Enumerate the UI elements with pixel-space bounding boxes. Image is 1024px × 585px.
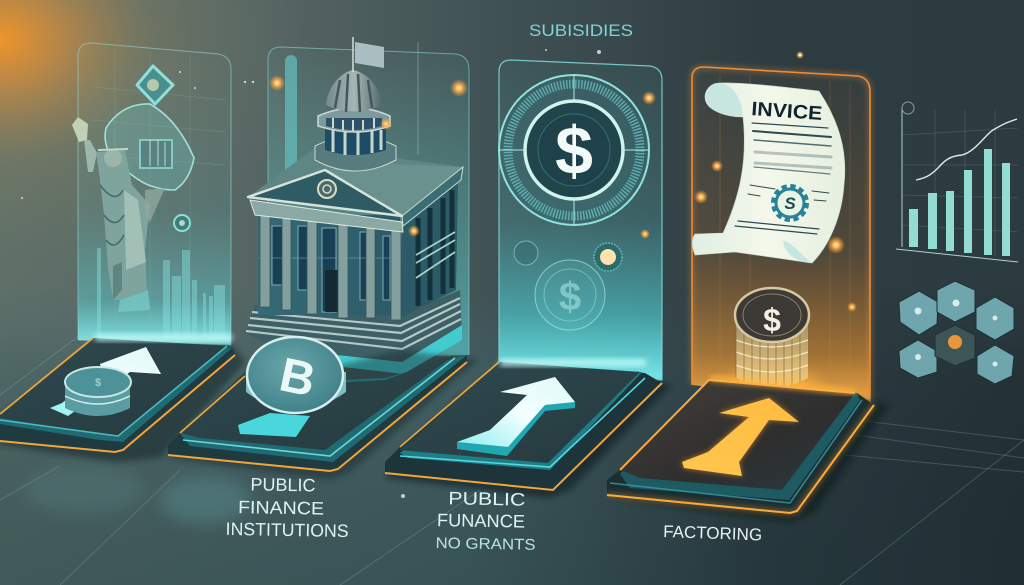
icon: diamond badge [137,66,173,104]
icon: ghost dollar coin: $ [559,275,581,319]
icon: bitcoin coin [246,337,346,413]
icon: arrow [682,398,799,476]
icon: small coins [514,241,622,271]
bars inside panel [97,248,225,340]
icon: ghost dollar coin [535,260,605,330]
label: public funance no grants [435,488,537,554]
icon: gear seal [774,187,806,219]
invoice title: INVICE [751,98,823,125]
label: public funance no grants: FUNANCE [437,510,525,532]
panel 2 frame [268,42,469,360]
drum [315,136,396,171]
chart bars [909,149,1010,256]
icon: arrow [238,413,310,437]
label: public funance no grants: NO GRANTS [435,535,536,554]
mini chart [896,102,1018,262]
dome [326,70,382,112]
label: public finance institutions [225,474,350,541]
trend line [916,119,1017,180]
building: public institution [245,37,463,374]
columns [260,215,401,320]
icon: gear seal: S [784,194,796,213]
pediment [248,170,402,216]
entablature [250,200,403,232]
label: public finance institutions: PUBLIC [250,474,316,495]
panel 1: statue and public support [72,43,231,345]
label: public finance institutions: INSTITUTIONS [225,519,349,541]
side wall [400,180,458,318]
panel 4: factoring [692,51,870,405]
icon: gold coin stack: $ [763,302,781,338]
platform 1 [0,334,245,462]
panel 3: subsidies [499,60,662,380]
icon: arrow [50,347,161,416]
label: public finance institutions: FINANCE [238,497,324,519]
icon: statue of liberty [72,117,165,312]
panel frame [692,67,870,405]
icon: invoice scroll [692,83,845,263]
platform 3 [385,359,672,498]
icon: small ring [174,215,190,231]
heading: subsidies: SUBISIDIES [529,22,633,40]
panel frame [499,60,662,380]
platform 4 [607,378,888,522]
icon: bitcoin coin: B [275,348,320,407]
icon: dollar medallion [499,75,649,225]
icon: glass shield [105,104,194,190]
icon: gold coin stack [724,288,820,397]
icon: coin stack [65,367,131,416]
label: factoring: FACTORING [663,522,762,544]
icon: coin stack: $ [95,377,101,389]
flag [353,37,384,72]
roof [248,148,463,216]
icon: dollar medallion: $ [555,113,593,189]
hexagon icon cluster [899,281,1014,384]
platform 2 [168,337,478,480]
panel frame [78,43,231,345]
label: public funance no grants: PUBLIC [448,488,526,510]
icon: arrow [457,377,575,456]
sparkle particles [21,49,802,498]
base steps [245,290,462,374]
front wall [258,215,400,315]
